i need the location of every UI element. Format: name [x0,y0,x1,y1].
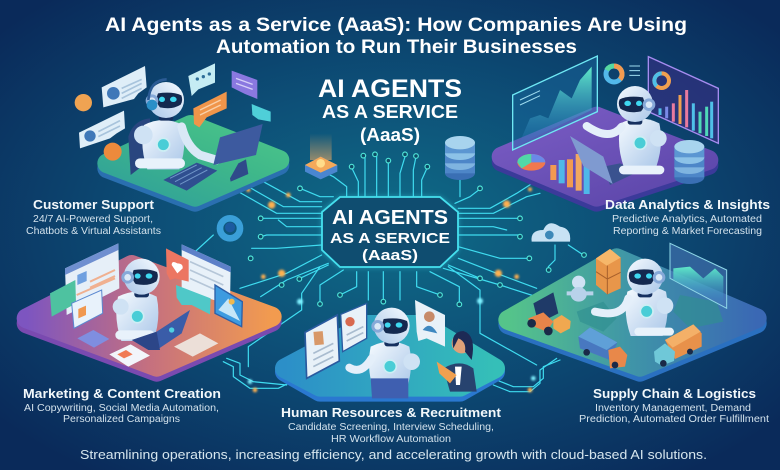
label: supply chain: Prediction, Automated Order Fulfillment [579,414,769,425]
icon: heart card [166,248,189,282]
chart panel left [513,56,597,150]
heading: upper service name: (AaaS) [360,125,420,145]
label: customer support: Customer Support [33,197,155,212]
panel: human resources [281,300,502,445]
chart panel [670,243,727,308]
label: human resources: Human Resources & Recruitment [281,405,502,420]
hub text: AI AGENTS [332,207,448,229]
label: supply chain [579,386,769,425]
hub text: (AaaS) [362,247,418,264]
label: data analytics: Data Analytics & Insights [605,197,770,212]
icon: social card [50,280,76,317]
label: marketing: Marketing & Content Creation [23,386,221,401]
label: supply chain: Supply Chain & Logistics [593,386,756,401]
heading: title [105,15,687,58]
label: marketing: AI Copywriting, Social Media Automation, [24,403,219,414]
platform [508,258,757,372]
robot [349,308,420,391]
icon: database [674,140,704,184]
world map [577,295,723,332]
label: supply chain: Inventory Management, Demand [595,403,751,414]
chat bubbles [75,63,271,161]
browser window [65,243,119,315]
platform [27,265,272,372]
heading: title: AI Agents as a Service (AaaS): How Companies Are Using [105,15,687,36]
bubble [176,285,211,314]
label: data analytics: Predictive Analytics, Automated [612,214,762,225]
panel: marketing [23,243,272,425]
monitor [213,124,263,165]
circuit network [193,152,560,392]
panel: supply chain [508,243,769,425]
label: human resources: HR Workflow Automation [331,434,451,445]
top traces [300,188,333,197]
chart panel right [648,57,718,143]
laptop [132,310,190,350]
truck: blue [578,327,627,368]
panel: data analytics [502,56,770,237]
icon: cloud [531,223,586,272]
forklift [527,292,571,335]
heading: upper service name: AS A SERVICE [322,102,458,122]
person [437,331,477,392]
laptop [570,136,638,185]
label: customer support [26,197,161,237]
platform [107,125,279,202]
truck: orange [654,324,702,367]
label: human resources: Candidate Screening, Interview Scheduling, [288,422,494,433]
document window [182,244,231,305]
laptop [371,378,408,398]
heading: upper service name [318,75,462,145]
card [72,290,103,328]
candidate card [415,300,445,347]
pie chart [517,154,545,171]
chair [128,118,150,175]
robot [595,259,673,336]
links between panels [227,358,287,385]
robot [113,259,160,341]
robot [587,86,667,170]
keyboard [163,163,217,191]
donut chart [606,66,640,82]
label: customer support: 24/7 AI-Powered Support, [33,214,153,225]
small cards [77,330,218,367]
hub text [330,207,450,264]
label: data analytics: Reporting & Market Forecasting [613,226,762,237]
label: human resources [281,405,502,445]
platform [502,117,708,202]
bottom traces [300,265,328,278]
platform [285,325,495,392]
resume cards [305,303,367,378]
panel: customer support [26,63,279,237]
hub text: AS A SERVICE [330,230,450,247]
mini robot [567,276,593,302]
image card [215,285,242,327]
icon: database [445,136,475,180]
icon: chip [305,133,337,179]
label: data analytics [605,197,770,237]
robot [134,79,217,169]
label: marketing: Personalized Campaigns [63,414,180,425]
central hub [322,197,458,267]
right traces [458,183,533,208]
label: customer support: Chatbots & Virtual Assistants [26,226,161,237]
heading: upper service name: AI AGENTS [318,75,462,103]
heading: title: Automation to Run Their Businesses [216,37,577,58]
footer tagline: Streamlining operations, increasing efficiency, and accelerating growth with cloud-based AI solutions. [80,447,707,462]
left traces [240,193,322,213]
label: marketing [23,386,221,425]
icon: gear [220,218,240,238]
bar chart [553,154,587,194]
icon: boxes [596,249,621,294]
